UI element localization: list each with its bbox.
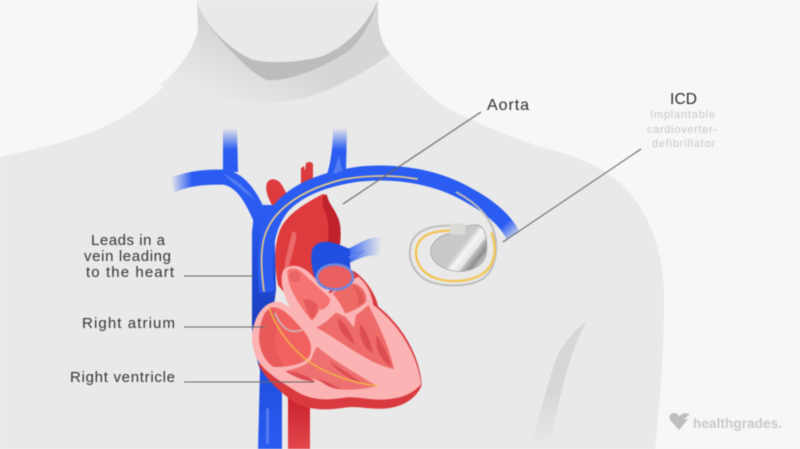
vein: right upper branch [325, 128, 347, 180]
label: leads in a vein leading to the heart: to the heart [86, 264, 175, 281]
vein: left upper branch [223, 128, 238, 172]
label: leads in a vein leading to the heart: Leads in a [91, 232, 166, 249]
leader line: right ventricle [184, 381, 314, 383]
lead in vein [262, 176, 417, 291]
label: ICD description [647, 109, 717, 150]
logo: healthgrades [670, 413, 782, 431]
pulmonary vein [311, 237, 381, 285]
leader line: right atrium [184, 326, 265, 328]
logo: healthgrades: healthgrades. [693, 416, 782, 431]
heart: right ventricle [287, 347, 377, 390]
ICD device with coiled leads [410, 192, 496, 285]
heart: dark outer wall [258, 271, 422, 409]
label: ICD description: Implantable [650, 109, 715, 121]
shoulder crease [532, 320, 587, 449]
heart: pink muscle [252, 266, 421, 400]
aorta branch: left [266, 179, 290, 212]
label: ICD description: defibrillator [652, 138, 715, 150]
leader line: ICD [503, 149, 641, 242]
inner yellow lead [416, 231, 495, 281]
pulmonary valve ring [317, 264, 353, 290]
label: right atrium: Right atrium [82, 315, 175, 332]
heart: left atrium [333, 283, 366, 313]
vein: arc to shoulder [265, 173, 513, 292]
label: right ventricle: Right ventricle [70, 369, 175, 386]
label: leads in a vein leading to the heart: vein leading [84, 248, 171, 265]
aorta [275, 194, 341, 300]
heart: left ventricle [316, 305, 394, 369]
descending aorta [288, 390, 310, 449]
neck shadow [160, 0, 390, 103]
vein: main trunk [252, 205, 282, 449]
connector block [450, 224, 465, 234]
vein: left arm [172, 177, 262, 222]
label: ICD description: cardioverter- [647, 124, 717, 136]
leader line: aorta [343, 112, 481, 204]
icon: logo heart [670, 413, 690, 430]
heart: yellow lead [269, 308, 377, 386]
heart: right atrium [259, 307, 311, 367]
heart: gray lead [275, 313, 302, 331]
label: leads in a vein leading to the heart [84, 232, 175, 281]
vein highlights [223, 155, 365, 444]
leader line: leads in a vein [184, 275, 254, 277]
generator case [431, 225, 487, 271]
chin shadow [197, 0, 378, 80]
aorta branch: right [301, 162, 313, 190]
label: ICD: ICD [670, 91, 697, 108]
heart [252, 266, 422, 409]
heart: pulmonary chamber [287, 269, 330, 321]
outer gray lead [410, 192, 496, 285]
head [196, 0, 378, 62]
label: Aorta: Aorta [487, 97, 529, 114]
